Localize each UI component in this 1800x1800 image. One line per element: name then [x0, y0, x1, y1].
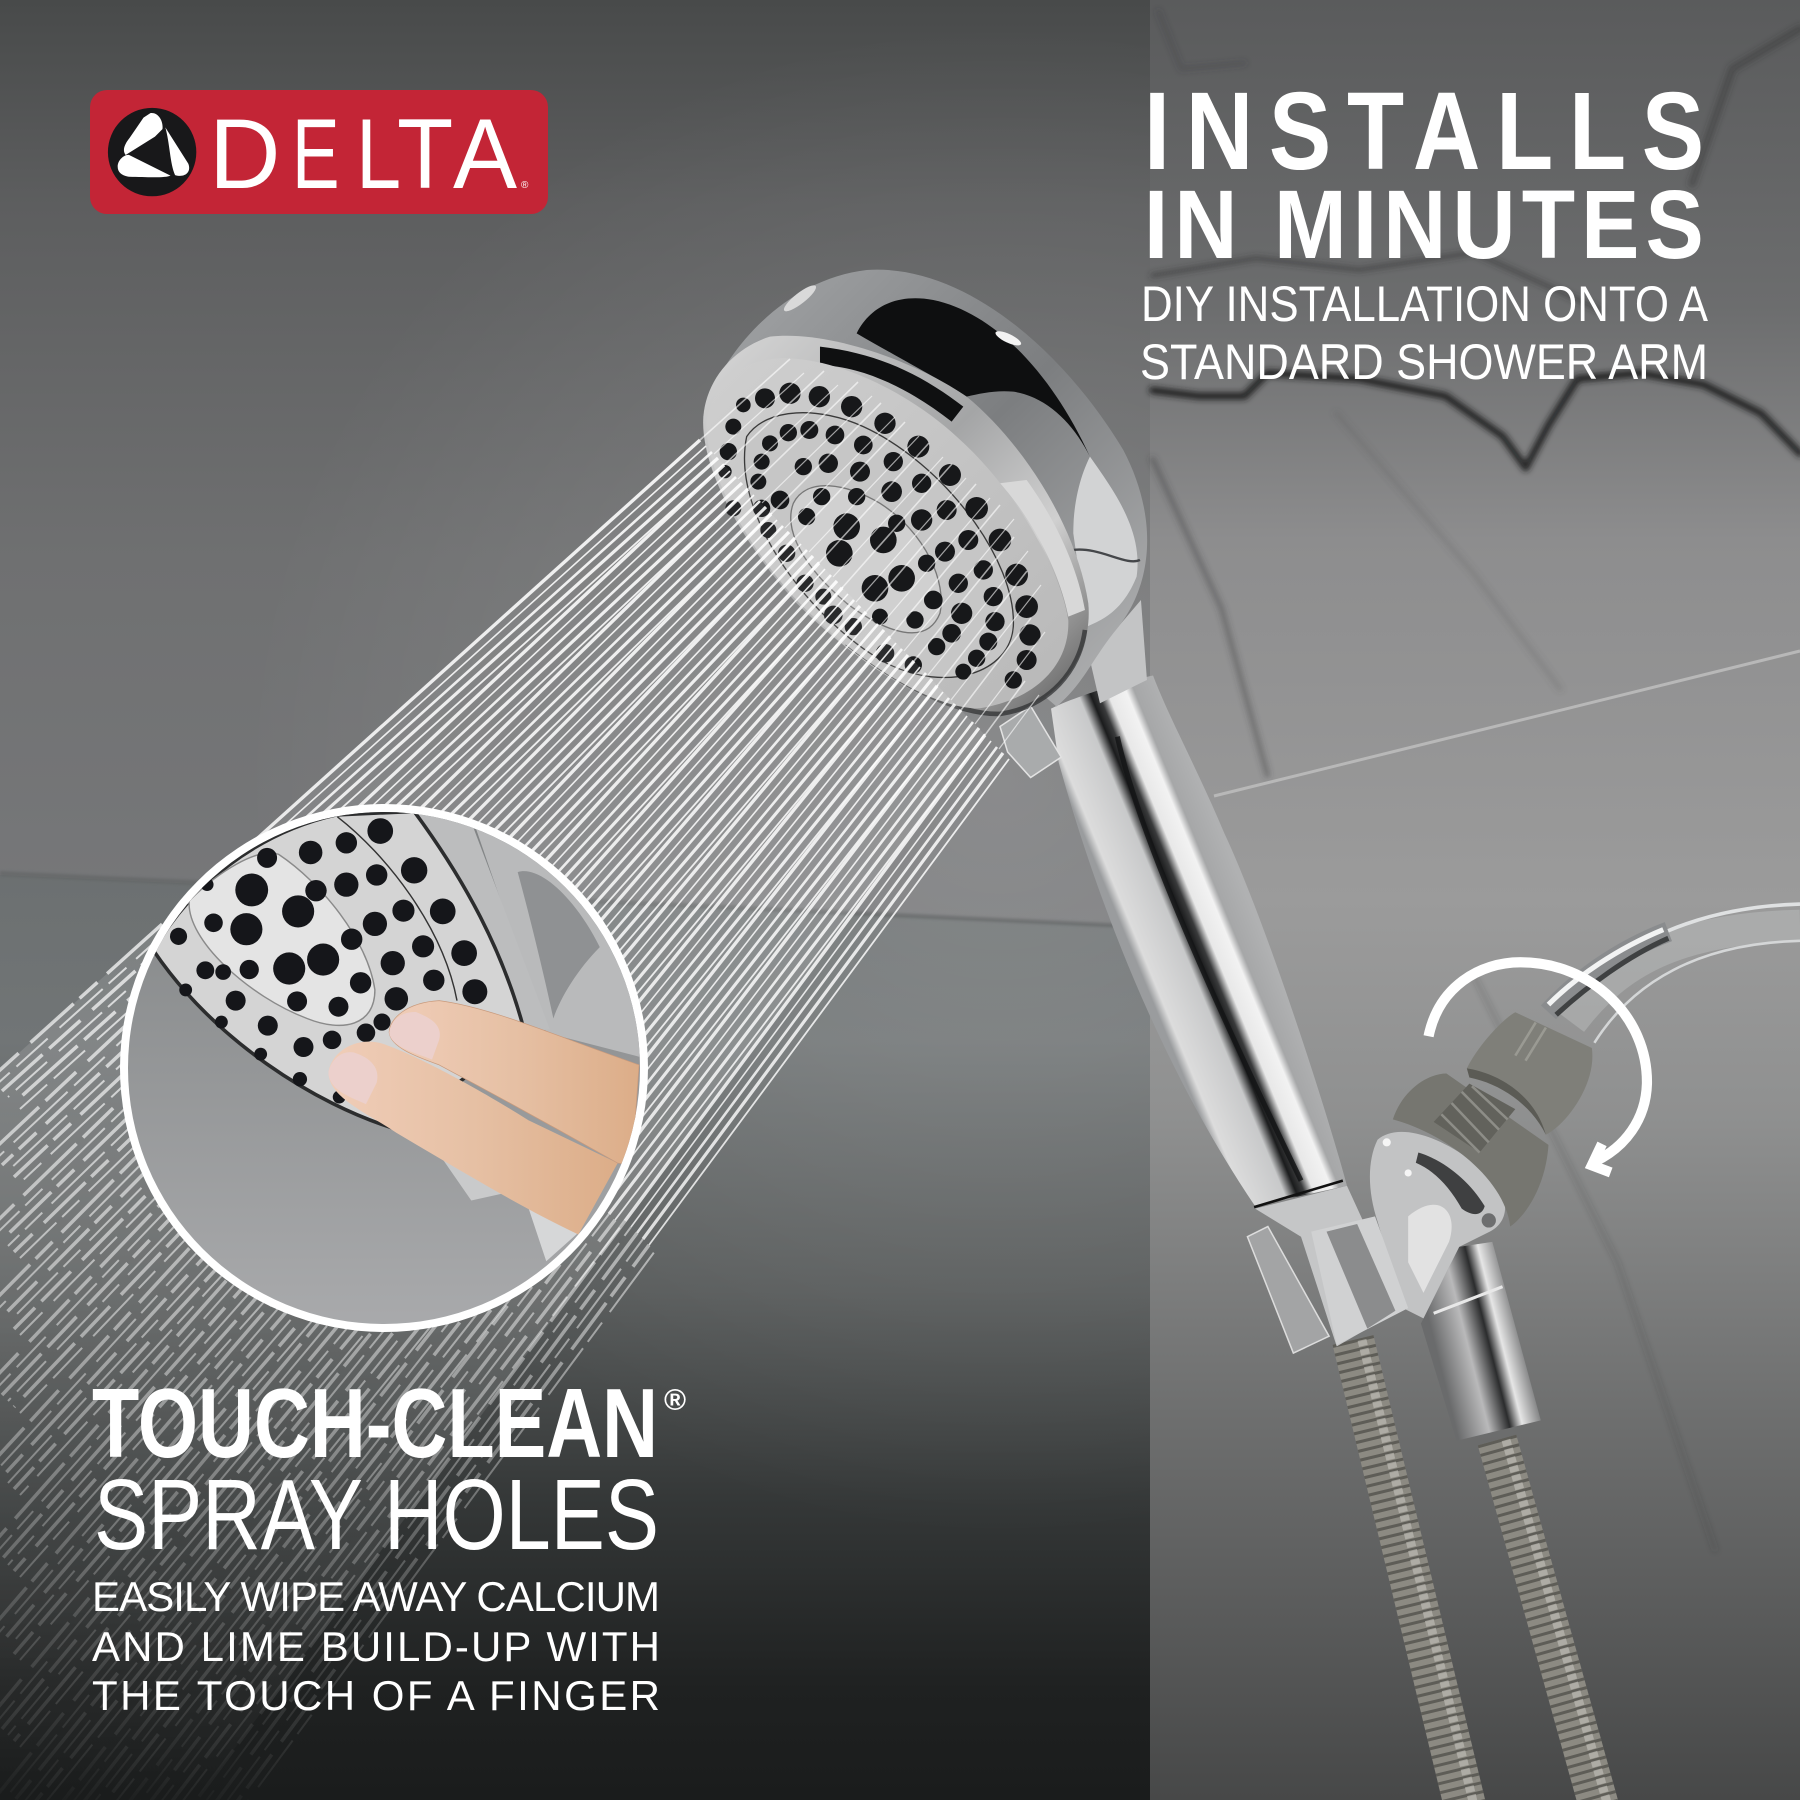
installs subtext: STANDARD SHOWER ARM	[1140, 334, 1708, 390]
shower head	[703, 270, 1147, 715]
dome right highlight	[1073, 457, 1138, 627]
dome dark reflection	[857, 298, 1090, 457]
touch-clean subtext: AND LIME BUILD-UP WITH	[92, 1623, 660, 1670]
heading: installs in minutes	[1144, 70, 1704, 279]
installs subtext	[1140, 276, 1709, 390]
wordmark: E	[292, 100, 340, 210]
wordmark: L	[356, 99, 401, 210]
touch-clean subtext: THE TOUCH OF A FINGER	[92, 1672, 660, 1719]
water streaks on face	[700, 359, 1045, 749]
solid water streaks	[200, 440, 1009, 1245]
head dome	[703, 270, 1147, 707]
wordmark: T	[397, 99, 453, 210]
face grooves	[745, 413, 1013, 677]
heading: touch-clean spray holes	[92, 1368, 686, 1571]
inset face plate	[154, 811, 525, 1129]
broken water streaks	[0, 890, 655, 1800]
touch-clean subtext: EASILY WIPE AWAY CALCIUM	[92, 1573, 660, 1620]
wordmark: A	[453, 99, 517, 209]
marble wall panel	[1150, 0, 1800, 1800]
touch-clean subtext	[92, 1573, 660, 1719]
spray holes	[718, 383, 1041, 689]
inset chrome back	[476, 830, 640, 1057]
heading: installs in minutes: IN MINUTES	[1144, 170, 1704, 279]
inset holes	[170, 818, 487, 1103]
installs subtext: DIY INSTALLATION ONTO A	[1141, 276, 1709, 332]
inset fingernails	[389, 1012, 440, 1060]
hand shower handle	[1051, 676, 1347, 1207]
shower hose right	[1497, 1440, 1609, 1800]
small gray nut	[1467, 1012, 1592, 1135]
wordmark: D	[209, 98, 280, 209]
heading: touch-clean spray holes: TOUCH-CLEAN	[92, 1368, 658, 1478]
heading: touch-clean spray holes: ®	[664, 1384, 686, 1417]
handle bracket plate	[1247, 1227, 1329, 1353]
face plate	[706, 358, 1068, 708]
rotation arrow	[1429, 962, 1647, 1172]
back wall lower gradient	[0, 875, 1150, 1800]
swivel joint	[1370, 1132, 1505, 1318]
wordmark	[209, 98, 517, 210]
inset circle: finger wiping spray holes	[120, 800, 657, 1332]
heading: installs in minutes: INSTALLS	[1144, 70, 1704, 193]
heading: touch-clean spray holes: SPRAY HOLES	[94, 1459, 659, 1571]
lower pipe	[1421, 1242, 1541, 1441]
inset upper finger	[389, 1001, 639, 1165]
back wall upper	[0, 0, 1150, 930]
chrome ring	[703, 336, 1089, 715]
bracket clip	[1311, 1216, 1408, 1345]
shower arm and wall mount	[1000, 676, 1800, 1441]
shower arm	[1548, 904, 1800, 1043]
inset silver ring	[414, 811, 550, 1033]
tile seam	[1214, 651, 1800, 796]
lower handle sleeve	[1255, 1186, 1403, 1346]
inset lower handle pieces	[444, 1160, 501, 1200]
inset lower finger	[328, 1042, 618, 1234]
spray selector button	[1000, 706, 1061, 778]
shower hose left	[1353, 1340, 1475, 1800]
wall seam line	[0, 871, 1150, 929]
logo mark	[108, 108, 196, 196]
water spray	[0, 359, 1045, 1800]
wall side glow	[0, 0, 1150, 1800]
Delta logo badge: ®	[521, 180, 529, 191]
large gray nut	[1393, 1073, 1548, 1227]
Delta logo badge	[90, 90, 548, 214]
head highlights	[994, 328, 1023, 348]
inset oval	[189, 853, 375, 1025]
marble veins	[1153, 11, 1800, 1550]
head neck	[1090, 600, 1147, 703]
spray haze	[0, 440, 985, 1800]
